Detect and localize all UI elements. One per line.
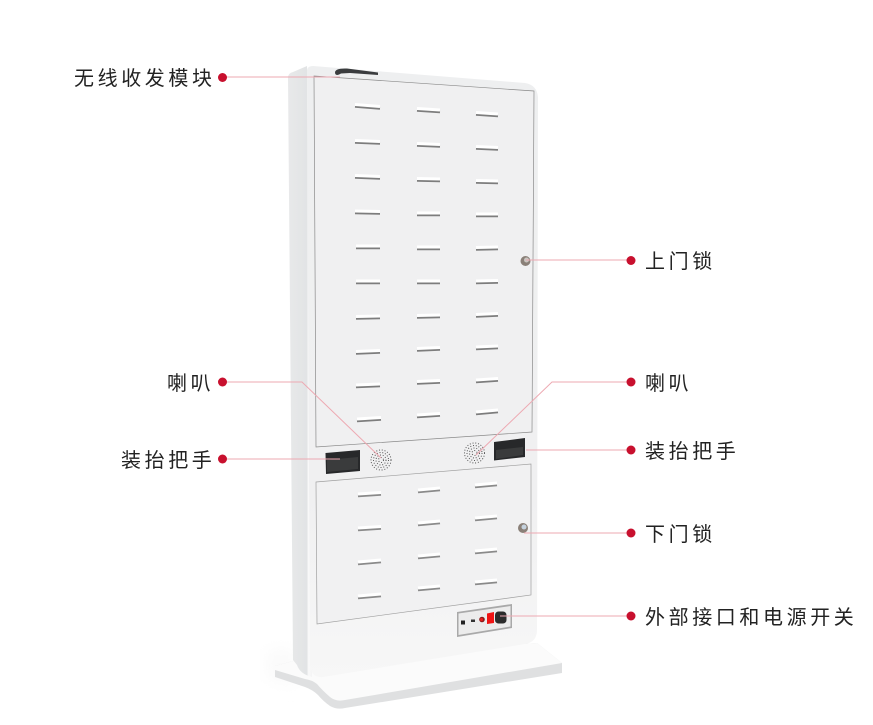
lower door slots xyxy=(358,483,497,598)
upper door lock xyxy=(520,256,530,266)
wireless antenna xyxy=(335,68,378,75)
callout: left speaker xyxy=(167,372,381,458)
callout: right speaker xyxy=(476,372,692,455)
upper door xyxy=(314,76,534,447)
callout: left carrying handle: 装抬把手 xyxy=(121,449,215,472)
callout: wireless module xyxy=(74,67,340,90)
callout: left speaker: 喇叭 xyxy=(167,372,214,395)
external ports and power switch panel xyxy=(457,604,512,637)
base plate xyxy=(275,643,562,709)
callout: external ports and power switch: 外部接口和电源开关 xyxy=(645,606,857,629)
callout: upper door lock xyxy=(526,250,716,273)
callout: right carrying handle: 装抬把手 xyxy=(645,440,739,463)
callout: lower door lock: 下门锁 xyxy=(645,523,716,546)
cabinet side xyxy=(288,66,312,677)
callout: upper door lock: 上门锁 xyxy=(645,250,716,273)
floor shadow xyxy=(266,650,296,686)
callout: right carrying handle xyxy=(526,440,739,463)
right speaker xyxy=(464,443,484,463)
callout: right speaker: 喇叭 xyxy=(645,372,692,395)
cabinet front xyxy=(307,66,538,677)
right carrying handle xyxy=(494,438,525,460)
callout: left carrying handle xyxy=(121,449,340,472)
upper door slots xyxy=(355,104,498,421)
callout: external ports and power switch xyxy=(500,606,857,629)
callout: lower door lock xyxy=(524,523,716,546)
lower door xyxy=(316,464,531,624)
left speaker xyxy=(371,450,391,470)
left carrying handle xyxy=(326,450,360,474)
lower door lock xyxy=(518,523,528,533)
callout: wireless module: 无线收发模块 xyxy=(74,67,216,90)
product: charging cabinet xyxy=(275,66,562,709)
